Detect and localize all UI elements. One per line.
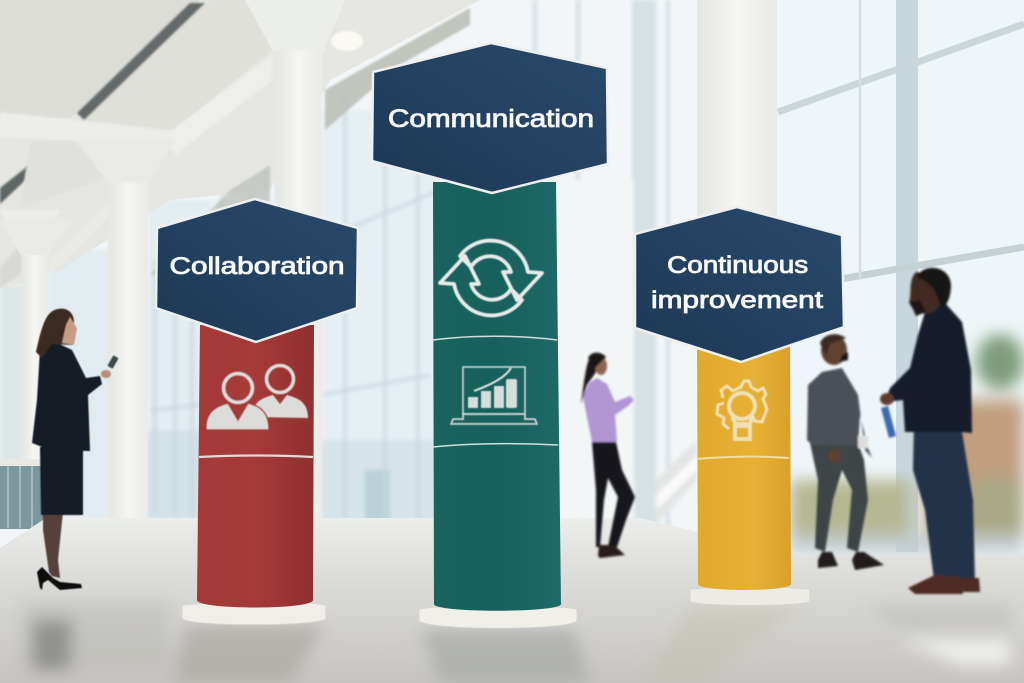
person: woman in lilac top, centre <box>581 353 635 558</box>
label: Continuous improvement: Continuous <box>667 252 808 279</box>
hexagon sign: Communication <box>372 43 608 193</box>
divider band <box>199 456 313 457</box>
background: window frames at right <box>778 0 1024 560</box>
person: woman with phone at left <box>32 309 119 590</box>
background: glazing on the far wall <box>0 0 697 540</box>
pillar body: green <box>433 182 561 611</box>
label: Continuous improvement: improvement <box>651 287 823 314</box>
label: Collaboration: Collaboration <box>170 253 344 280</box>
pillar base: green <box>419 606 577 628</box>
background: polished floor <box>0 518 1024 683</box>
background: white columns <box>0 0 777 530</box>
hexagon sign: Collaboration <box>156 199 358 342</box>
person: man in grey shirt <box>807 334 884 570</box>
pillar: green Communication <box>419 182 577 628</box>
background: trees outside <box>788 334 1024 553</box>
icon: gear with lightbulb <box>717 381 767 439</box>
pillar body: yellow <box>697 345 791 590</box>
hexagon sign: Continuous improvement <box>635 207 844 362</box>
pillar body: red <box>197 325 314 608</box>
pillar: yellow Continuous improvement <box>690 345 810 606</box>
background: floor reflections <box>20 600 1010 683</box>
person: man in dark jacket, far right <box>880 268 980 594</box>
icon: laptop with bar chart <box>451 367 537 424</box>
pillar base: yellow <box>690 587 810 606</box>
background: glass railing <box>0 459 46 529</box>
icon: two people <box>206 366 308 430</box>
background: ceiling <box>0 0 480 290</box>
label: Communication: Communication <box>388 105 594 133</box>
icon: circular arrows <box>440 241 542 315</box>
pillar: red Collaboration <box>182 325 326 625</box>
pillar base: red <box>182 602 326 625</box>
